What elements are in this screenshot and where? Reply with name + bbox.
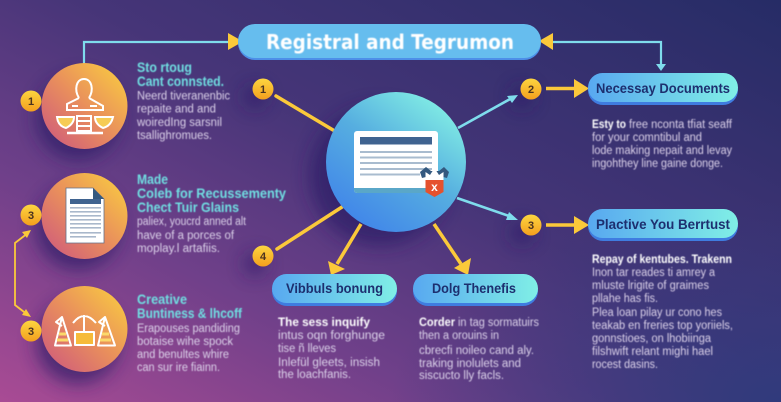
title banner (238, 24, 541, 60)
badge 3 left bottom (20, 320, 42, 342)
badge 3 left middle (20, 204, 42, 226)
text block: step 3: Buntiness & lhcoff (137, 306, 242, 321)
text block: necessary documents: ingohthey line gaine donge. (592, 158, 723, 170)
text block: vibbuls bonung: Inlefül gleets, insish (278, 357, 380, 369)
pill: necessary documents: Necessay Documents (596, 80, 730, 96)
text block: vibbuls bonung: intus oqn forghunge (278, 330, 385, 342)
text block: plactive you berrtust: Repay of kentubes. Trakenn (592, 254, 732, 266)
icon: document (66, 188, 104, 243)
text block: dolg thenefis: siscucto lly facls. (419, 370, 504, 382)
pill: vibbuls bonung (272, 274, 397, 306)
badge 4 center (252, 246, 274, 266)
pill: necessary documents (588, 73, 738, 105)
text block: plactive you berrtust: gonnstioes, on lhobiinga (592, 333, 712, 345)
text block: vibbuls bonung: the loachfanis. (278, 369, 351, 381)
text block: step 1: tsallighromues. (137, 130, 212, 142)
badge 1 center (252, 78, 274, 100)
text block: step 2: Made (137, 172, 168, 187)
icon: cones and crane (55, 315, 115, 346)
arrow: center to right bottom pill (434, 224, 471, 275)
text block: step 1: Cant connsted. (137, 74, 224, 89)
arrow: center to badge 1 (276, 96, 333, 130)
text block: step 1: Sto rtoug (137, 60, 192, 75)
badge 3 right (520, 214, 542, 236)
badge 1 center: 1 (260, 84, 266, 96)
text block: step 3: Creative (137, 292, 187, 307)
badge 4 center: 4 (260, 251, 267, 263)
arrow: center to badge 3 (457, 198, 518, 220)
text block: dolg thenefis: cbrecfi noileo cand aly. (419, 345, 534, 357)
arrow: badge 2 to necessary documents (546, 79, 589, 98)
text block: step 3: Erapouses pandiding (137, 323, 240, 335)
text block: dolg thenefis: traking inolulets and (419, 358, 521, 370)
text block: step 2: have of a porces of (137, 230, 235, 242)
text block: vibbuls bonung (278, 317, 385, 381)
arrow: center to left bottom pill (328, 224, 361, 275)
pill: dolg thenefis (413, 274, 538, 306)
text block: step 3: botaise wihe spock (137, 336, 233, 348)
pill: plactive you berrtust (588, 209, 738, 241)
text block: step 1: woiredIng sarsnil (136, 117, 222, 129)
icon: stamp and scales (57, 79, 113, 133)
text block: necessary documents: for your comntibul and (592, 132, 702, 144)
pill: plactive you berrtust: Plactive You Berrtust (596, 216, 730, 232)
text block: step 2: Coleb for Recussementy (137, 186, 286, 201)
text block: plactive you berrtust: teakab en freries top yoriiels, (592, 320, 733, 332)
text block: plactive you berrtust: Plea loan pilay ur cono hes (592, 307, 722, 319)
text block: necessary documents: free nconta tfiat seaff (629, 119, 733, 131)
text block: step 2 (137, 172, 286, 255)
text block: step 3: can sur ire fiainn. (137, 362, 220, 374)
text block: plactive you berrtust (592, 254, 733, 371)
text block: step 3 (137, 292, 242, 374)
text block: plactive you berrtust: filshwift relant mighi hael (592, 346, 713, 358)
text block: step 2: moplay.l artafiis. (137, 243, 220, 255)
badge 1 left: 1 (28, 96, 34, 108)
text block: step 2: Chect Tuir Glains (137, 200, 239, 215)
badge 3 left middle: 3 (28, 210, 34, 222)
text block: plactive you berrtust: Inon tar reades ti amrey a (592, 267, 716, 279)
step 1 orb (42, 63, 128, 149)
connector: title to necessary documents (539, 33, 666, 71)
central circle with document icon (326, 92, 466, 232)
text block: step 3: and benultes whire (137, 349, 229, 361)
text block: necessary documents: Esty to (592, 119, 626, 131)
text block: dolg thenefis: then a orouins in (419, 330, 499, 342)
icon: registration card (354, 131, 438, 193)
double arrow between steps (15, 230, 31, 317)
text block: plactive you berrtust: pllahe has fis. (592, 293, 658, 305)
step 3 orb (42, 286, 128, 372)
text block: step 1: repaite and and (137, 104, 216, 116)
arrow: badge 3 to plactive (546, 216, 589, 234)
text block: plactive you berrtust: rocest dasins. (592, 359, 658, 371)
text block: step 1 (136, 60, 230, 142)
badge 2 right: 2 (528, 84, 534, 96)
text block: vibbuls bonung: tise ñ lleves (278, 343, 336, 355)
step 2 orb (42, 173, 128, 259)
text block: dolg thenefis: in tag sormatuirs (458, 317, 539, 329)
connector: top left to title (84, 33, 243, 64)
arrow: center to badge 4 (277, 207, 342, 249)
text block: plactive you berrtust: mluste lrigite of graimes (592, 280, 709, 292)
text block: vibbuls bonung: The sess inquify (278, 317, 371, 329)
title banner: Registral and Tegrumon (266, 30, 514, 54)
text block: dolg thenefis (419, 317, 539, 382)
text block: step 2: paliex, youcrd anned alt (137, 216, 247, 228)
soft shadows (36, 76, 533, 384)
text block: necessary documents: lode making nepait and levay (592, 145, 732, 157)
badge 3 left bottom: 3 (28, 326, 34, 338)
arrow: center to badge 2 (458, 95, 518, 128)
pill: dolg thenefis: Dolg Thenefis (432, 280, 516, 296)
icon: shield badge: x (431, 180, 438, 194)
text block: necessary documents (592, 119, 733, 170)
text block: dolg thenefis: Corder (419, 317, 455, 329)
pill: vibbuls bonung: Vibbuls bonung (286, 280, 383, 296)
badge 2 right (520, 78, 542, 100)
badge 1 left (20, 90, 42, 112)
badge 3 right: 3 (528, 220, 534, 232)
text block: step 1: Neerd tiveranenbic (137, 90, 230, 102)
